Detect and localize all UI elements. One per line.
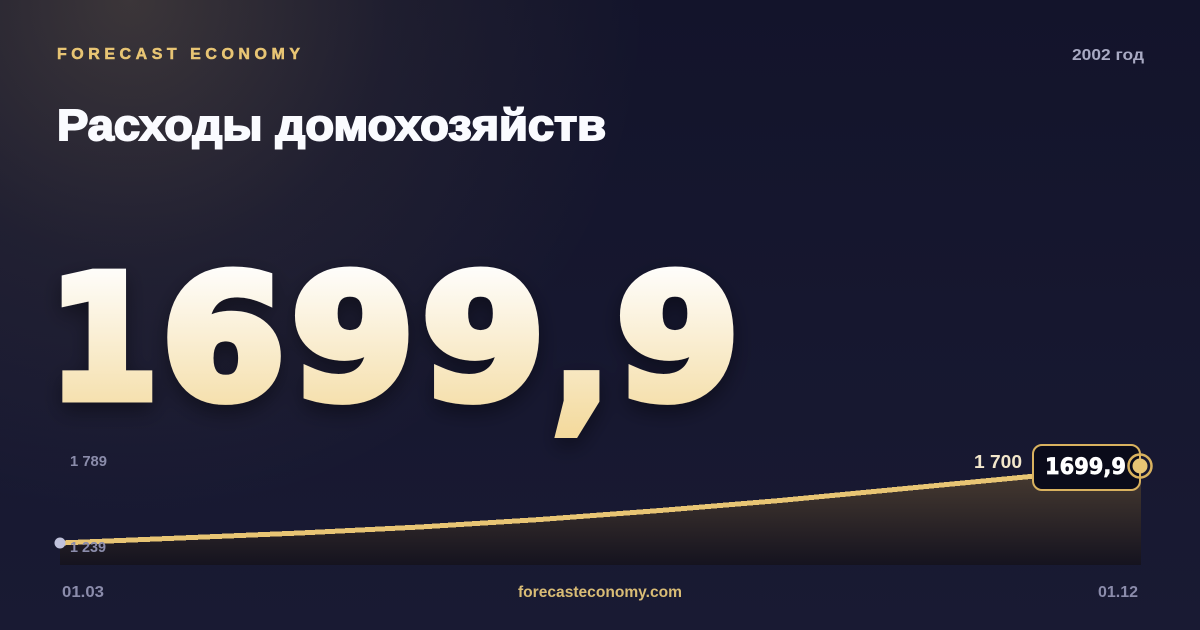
year label: 2002 год [1072,47,1144,64]
title: Расходы домохозяйств [57,101,606,150]
big value: 9 [291,241,415,439]
start date: 01.03 [62,584,104,601]
big value: , [548,233,615,454]
end date: 01.12 [1098,584,1138,601]
axis min label: 1 239 [70,540,106,556]
last value axis label: 1 700 [974,452,1022,472]
current value callout: 1699,9 [1045,455,1126,480]
area chart [54,466,1141,565]
current value callout [1033,445,1140,490]
big value: 6 [162,241,285,439]
big value [48,233,740,454]
axis max label: 1 789 [70,454,107,470]
site link: forecasteconomy.com [518,584,682,601]
big value: 1 [48,240,159,438]
brand label: FORECAST ECONOMY [57,46,300,63]
big value: 9 [422,241,545,439]
chart line [60,466,1140,543]
current point marker [1128,454,1152,478]
start point [54,538,66,548]
big value: 9 [616,241,740,439]
chart area fill [60,466,1141,565]
